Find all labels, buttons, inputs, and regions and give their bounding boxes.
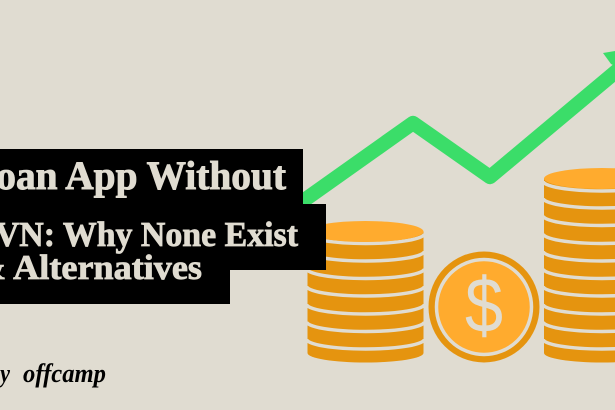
arrow: green rising trend line xyxy=(296,51,615,206)
icon: dollar coin: $ xyxy=(465,261,503,349)
icon: dollar coin xyxy=(428,252,540,362)
chart: right coin stack xyxy=(543,168,615,362)
chart: left coin stack xyxy=(306,221,424,362)
title banner xyxy=(0,149,326,304)
signature: by offcamp: offcamp xyxy=(23,359,106,388)
